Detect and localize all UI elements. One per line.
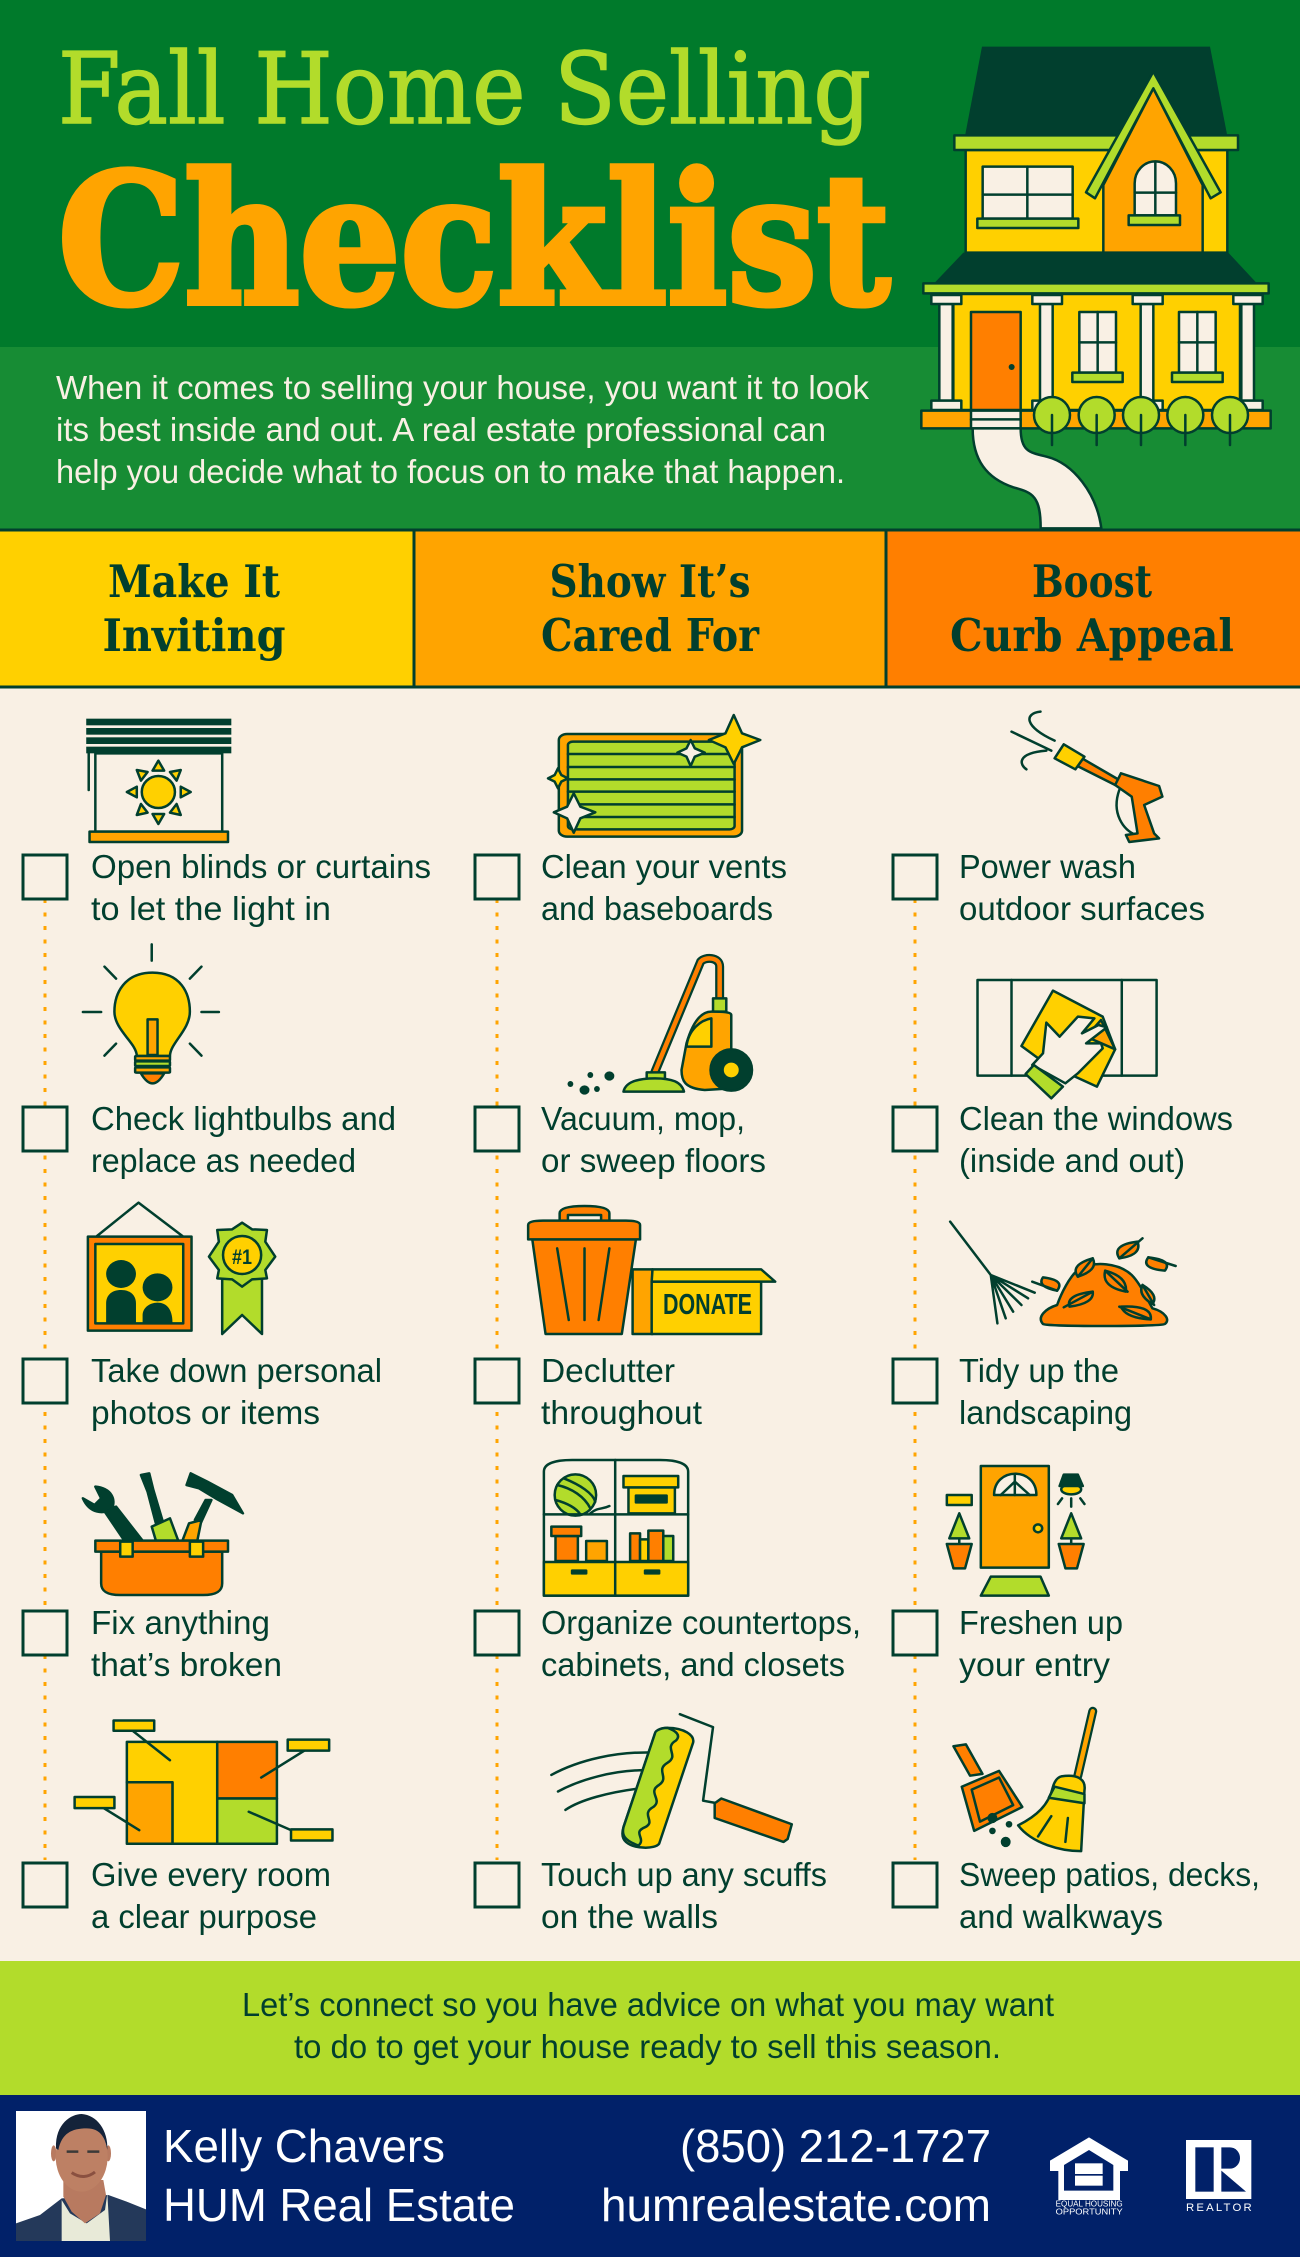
item: declutter <box>475 1352 702 1431</box>
icon: lightbulb <box>83 944 219 1083</box>
column heading: make it inviting: Inviting <box>102 609 286 662</box>
item: organize: cabinets, and closets <box>541 1646 845 1683</box>
item: fix broken: Fix anything <box>91 1604 270 1641</box>
item: sweep patios: and walkways <box>959 1898 1163 1935</box>
item: lightbulbs: replace as needed <box>91 1142 356 1179</box>
intro text <box>56 369 869 490</box>
call to action <box>0 1961 1300 2095</box>
header band <box>0 0 1300 347</box>
column heading: boost curb appeal: Curb Appeal <box>950 609 1234 662</box>
icon: equal housing opportunity logo: EQUAL HOUSING <box>1056 2200 1123 2209</box>
item: declutter: Declutter <box>541 1352 675 1389</box>
title: Fall Home Selling <box>58 33 871 147</box>
icon: vacuum <box>568 958 752 1095</box>
item: open blinds: Open blinds or curtains <box>91 848 431 885</box>
item: landscaping: landscaping <box>959 1394 1132 1431</box>
title: Checklist <box>58 135 890 346</box>
icon: paint roller <box>551 1714 792 1848</box>
column heading: show it's cared for: Show It’s <box>550 555 750 608</box>
item: organize: Organize countertops, <box>541 1604 861 1641</box>
phone and website <box>601 2120 991 2231</box>
phone and website: humrealestate.com <box>601 2179 991 2231</box>
icon: trash can and donate box: DONATE <box>663 1289 752 1321</box>
icon: window cleaning <box>978 980 1157 1098</box>
item: windows: (inside and out) <box>959 1142 1185 1179</box>
agent name and brokerage <box>163 2120 515 2231</box>
item: landscaping <box>893 1352 1132 1431</box>
item: open blinds: to let the light in <box>91 890 331 927</box>
column heading: boost curb appeal: Boost <box>1032 555 1152 608</box>
item: clean vents <box>475 848 787 927</box>
icon: family photo and ribbon: #1 <box>232 1246 252 1269</box>
icon: power washer <box>1012 712 1162 842</box>
icon: rake and leaves <box>950 1222 1176 1326</box>
item: personal photos: Take down personal <box>91 1352 382 1389</box>
item: room purpose <box>23 1856 331 1935</box>
agent name and brokerage: HUM Real Estate <box>163 2179 515 2231</box>
icon: trash can and donate box <box>528 1206 775 1334</box>
intro text: help you decide what to focus on to make that happen. <box>56 453 845 490</box>
intro text: its best inside and out. A real estate professional can <box>56 411 826 448</box>
item: sweep patios <box>893 1856 1260 1935</box>
intro text: When it comes to selling your house, you want it to look <box>56 369 869 406</box>
item: entry <box>893 1604 1123 1683</box>
item: power wash <box>893 848 1205 927</box>
agent name and brokerage: Kelly Chavers <box>163 2120 445 2172</box>
column heading: make it inviting: Make It <box>108 555 280 608</box>
item: clean vents: and baseboards <box>541 890 773 927</box>
item: power wash: Power wash <box>959 848 1136 885</box>
icon: clean vent <box>548 715 760 837</box>
item: room purpose: a clear purpose <box>91 1898 317 1935</box>
item: clean vents: Clean your vents <box>541 848 787 885</box>
icon: window blinds <box>86 719 231 842</box>
icon: broom and dustpan <box>953 1711 1093 1851</box>
item: entry: your entry <box>959 1646 1111 1683</box>
item: fix broken <box>23 1604 282 1683</box>
column heading: make it inviting <box>0 531 414 687</box>
icon: realtor logo <box>1186 2140 1252 2214</box>
intro band <box>0 347 1300 529</box>
item: power wash: outdoor surfaces <box>959 890 1205 927</box>
column heading: show it's cared for <box>414 531 886 687</box>
icon: toolbox <box>83 1473 243 1595</box>
item: vacuum: Vacuum, mop, <box>541 1100 745 1137</box>
icon: front entry <box>947 1466 1084 1596</box>
item: organize <box>475 1604 861 1683</box>
title <box>58 33 890 346</box>
column heading: show it's cared for: Cared For <box>541 609 760 662</box>
item: fix broken: that’s broken <box>91 1646 282 1683</box>
item: sweep patios: Sweep patios, decks, <box>959 1856 1260 1893</box>
icon: equal housing opportunity logo <box>1050 2137 1128 2217</box>
item: personal photos: photos or items <box>91 1394 320 1431</box>
item: touch up walls: on the walls <box>541 1898 718 1935</box>
item: touch up walls: Touch up any scuffs <box>541 1856 827 1893</box>
item: windows <box>893 1100 1233 1179</box>
item: open blinds <box>23 848 431 927</box>
item: room purpose: Give every room <box>91 1856 331 1893</box>
item: windows: Clean the windows <box>959 1100 1233 1137</box>
icon: family photo and ribbon <box>88 1203 275 1334</box>
icon: house <box>921 47 1271 528</box>
item: vacuum: or sweep floors <box>541 1142 766 1179</box>
icon: equal housing opportunity logo: OPPORTUNITY <box>1056 2208 1123 2217</box>
column heading: boost curb appeal <box>886 531 1300 687</box>
item: personal photos <box>23 1352 382 1431</box>
icon: shelves <box>544 1460 688 1596</box>
icon: realtor logo: REALTOR <box>1186 2202 1252 2214</box>
agent photo <box>16 2111 146 2241</box>
item: lightbulbs: Check lightbulbs and <box>91 1100 396 1137</box>
call to action: to do to get your house ready to sell this season. <box>294 2028 1001 2065</box>
call to action: Let’s connect so you have advice on what you may want <box>242 1986 1054 2023</box>
item: vacuum <box>475 1100 766 1179</box>
item: landscaping: Tidy up the <box>959 1352 1119 1389</box>
item: entry: Freshen up <box>959 1604 1123 1641</box>
footer band <box>0 2095 1300 2257</box>
icon: floor plan <box>75 1720 332 1844</box>
phone and website: (850) 212-1727 <box>680 2120 991 2172</box>
item: lightbulbs <box>23 1100 396 1179</box>
item: declutter: throughout <box>541 1394 702 1431</box>
item: touch up walls <box>475 1856 827 1935</box>
